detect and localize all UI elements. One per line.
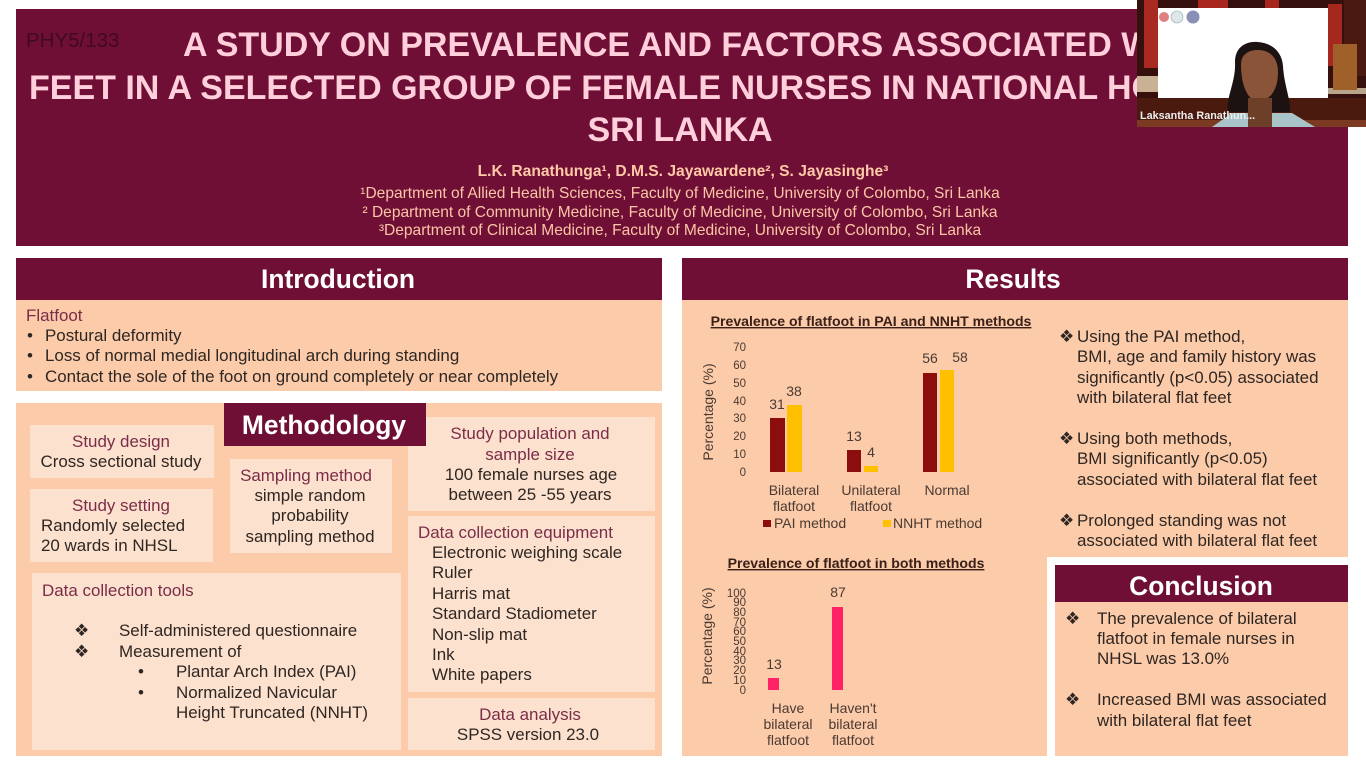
NNHT bars bbox=[787, 370, 954, 472]
title bbox=[29, 26, 1302, 149]
results findings: BMI, age and family history was bbox=[1077, 347, 1316, 366]
results findings: ❖ bbox=[1059, 327, 1074, 346]
results findings: Prolonged standing was not bbox=[1077, 511, 1286, 530]
bar chart: prevalence in both methods: 40 bbox=[733, 646, 746, 658]
heading: methodology: Methodology bbox=[242, 410, 406, 440]
bar chart: prevalence in both methods: flatfoot bbox=[832, 732, 874, 748]
results findings: significantly (p<0.05) associated bbox=[1077, 368, 1318, 387]
box: data collection equipment: Ink bbox=[432, 645, 455, 664]
bar chart: prevalence in PAI and NNHT methods: 70 bbox=[733, 342, 746, 354]
bar chart: prevalence in both methods: 100 bbox=[727, 588, 746, 600]
bar chart: prevalence in PAI and NNHT methods: NNHT method bbox=[893, 515, 982, 531]
bar chart: prevalence in both methods: 60 bbox=[733, 626, 746, 638]
bar chart: prevalence in PAI and NNHT methods: Percentage (%) bbox=[700, 363, 716, 461]
panel: results bbox=[682, 258, 1348, 756]
results findings bbox=[1059, 327, 1318, 550]
conclusion text: ❖ bbox=[1065, 690, 1080, 709]
box: data collection tools: ❖ bbox=[74, 621, 89, 640]
results findings: associated with bilateral flat feet bbox=[1077, 470, 1317, 489]
results findings: Using the PAI method, bbox=[1077, 327, 1245, 346]
bar chart: prevalence in both methods: 50 bbox=[733, 636, 746, 648]
introduction text: • bbox=[27, 346, 33, 365]
bar chart: prevalence in PAI and NNHT methods: flatfoot bbox=[773, 498, 815, 514]
box: data collection equipment: Ruler bbox=[432, 563, 473, 582]
box: data collection tools: • bbox=[138, 683, 144, 702]
results findings: ❖ bbox=[1059, 429, 1074, 448]
bar chart: prevalence in PAI and NNHT methods: 38 bbox=[786, 383, 802, 399]
bar chart: prevalence in both methods: bilateral bbox=[828, 716, 878, 732]
box: data collection tools: Self-administered questionnaire bbox=[119, 621, 357, 640]
box: data collection equipment: Electronic weighing scale bbox=[432, 543, 622, 562]
slide logos bbox=[1159, 10, 1200, 24]
bar chart: prevalence in PAI and NNHT methods: Prevalence of flatfoot in PAI and NNHT methods bbox=[711, 313, 1032, 329]
box: study setting: Randomly selected bbox=[41, 516, 185, 535]
authors and affiliations: ² Department of Community Medicine, Faculty of Medicine, University of Colombo, Sri Lanka bbox=[362, 204, 998, 221]
box: data collection equipment: White papers bbox=[432, 665, 532, 684]
authors and affiliations: ¹Department of Allied Health Sciences, Faculty of Medicine, University of Colombo, Sri Lanka bbox=[360, 185, 1000, 202]
bar chart: prevalence in both methods: Have bbox=[772, 700, 805, 716]
box: data collection tools: Measurement of bbox=[119, 642, 242, 661]
poster code: PHY5/133 bbox=[26, 29, 119, 52]
results findings: with bilateral flat feet bbox=[1076, 388, 1232, 407]
box: data analysis bbox=[408, 698, 655, 750]
box: study population: between 25 -55 years bbox=[449, 485, 611, 504]
introduction text: Contact the sole of the foot on ground completely or near completely bbox=[45, 367, 559, 386]
bar chart: prevalence in PAI and NNHT methods: 31 bbox=[769, 396, 785, 412]
shared slide bbox=[1158, 8, 1328, 98]
title: SRI LANKA bbox=[587, 111, 773, 149]
box: study setting bbox=[30, 489, 213, 562]
bar chart: prevalence in PAI and NNHT methods: 40 bbox=[733, 396, 746, 408]
box: sampling method: Sampling method bbox=[240, 466, 372, 485]
bar chart: prevalence in PAI and NNHT methods: 58 bbox=[952, 349, 968, 365]
panel: methodology bbox=[16, 403, 662, 756]
box: study setting: 20 wards in NHSL bbox=[41, 536, 178, 555]
results findings: associated with bilateral flat feet bbox=[1077, 531, 1317, 550]
bar chart: prevalence in both methods: 87 bbox=[830, 584, 846, 600]
conclusion text: The prevalence of bilateral bbox=[1097, 609, 1297, 628]
bar chart: prevalence in PAI and NNHT methods: 13 bbox=[846, 428, 862, 444]
box: data collection tools: ❖ bbox=[74, 642, 89, 661]
presenter name: Laksantha Ranathun... bbox=[1140, 110, 1255, 122]
box: sampling method: sampling method bbox=[246, 527, 374, 546]
bar chart: prevalence in PAI and NNHT methods: 56 bbox=[922, 350, 938, 366]
box: study design: Cross sectional study bbox=[41, 452, 202, 471]
heading: results: Results bbox=[965, 264, 1061, 294]
authors and affiliations bbox=[360, 163, 1000, 239]
results findings: Using both methods, bbox=[1077, 429, 1232, 448]
bar chart: prevalence in both methods: 80 bbox=[733, 607, 746, 619]
box: data collection tools: Normalized Navicular bbox=[176, 683, 337, 702]
box: data collection equipment bbox=[408, 516, 655, 692]
bar chart: prevalence in PAI and NNHT methods: PAI method bbox=[774, 515, 846, 531]
box: data collection tools: Height Truncated (NNHT) bbox=[176, 703, 368, 722]
box: study design bbox=[30, 425, 214, 478]
bar chart: prevalence in PAI and NNHT methods: 20 bbox=[733, 431, 746, 443]
box: data collection equipment: Harris mat bbox=[432, 584, 510, 603]
box: data collection equipment: Data collection equipment bbox=[418, 523, 613, 542]
bar chart: prevalence in both methods: 20 bbox=[733, 665, 746, 677]
panel: conclusion bbox=[1055, 565, 1348, 756]
webcam overlay bbox=[1137, 0, 1366, 127]
box: study population bbox=[408, 417, 655, 511]
conclusion text: Increased BMI was associated bbox=[1097, 690, 1327, 709]
introduction text: • bbox=[27, 367, 33, 386]
bar chart: prevalence in both methods: 10 bbox=[733, 675, 746, 687]
box: study population: sample size bbox=[485, 445, 575, 464]
heading: introduction: Introduction bbox=[261, 264, 415, 294]
box: data collection equipment: Non-slip mat bbox=[432, 625, 527, 644]
heading: conclusion: Conclusion bbox=[1129, 571, 1273, 601]
authors and affiliations: ³Department of Clinical Medicine, Faculty of Medicine, University of Colombo, Sri Lanka bbox=[379, 222, 981, 239]
introduction text bbox=[26, 306, 559, 386]
box: data collection tools bbox=[32, 573, 401, 750]
conclusion text: ❖ bbox=[1065, 609, 1080, 628]
conclusion text: with bilateral flat feet bbox=[1096, 711, 1252, 730]
box: data collection tools: Data collection tools bbox=[42, 581, 194, 600]
bar chart: prevalence in both methods: Percentage (%) bbox=[699, 587, 715, 685]
box: study population: Study population and bbox=[450, 424, 610, 443]
box: data collection equipment: Standard Stadiometer bbox=[432, 604, 597, 623]
box: study setting: Study setting bbox=[72, 496, 170, 515]
box: data analysis: Data analysis bbox=[479, 705, 581, 724]
bar chart: prevalence in both methods: 13 bbox=[766, 656, 782, 672]
bar chart: prevalence in both methods: 70 bbox=[733, 617, 746, 629]
results findings: ❖ bbox=[1059, 511, 1074, 530]
presenter bbox=[1212, 42, 1315, 127]
conclusion text bbox=[1065, 609, 1327, 730]
box: data collection tools: • bbox=[138, 662, 144, 681]
box: study design: Study design bbox=[72, 432, 170, 451]
box: sampling method: probability bbox=[271, 506, 349, 525]
bar chart: prevalence in PAI and NNHT methods: 4 bbox=[867, 444, 875, 460]
box: study population: 100 female nurses age bbox=[445, 465, 617, 484]
bar chart: prevalence in PAI and NNHT methods: 10 bbox=[733, 449, 746, 461]
bar chart: prevalence in PAI and NNHT methods: 30 bbox=[733, 413, 746, 425]
heading: methodology bbox=[224, 403, 426, 446]
introduction text: Flatfoot bbox=[26, 306, 83, 325]
bar chart: prevalence in both methods: 0 bbox=[740, 685, 746, 697]
introduction text: Loss of normal medial longitudinal arch during standing bbox=[45, 346, 459, 365]
bar chart: prevalence in PAI and NNHT methods: Normal bbox=[924, 482, 970, 498]
bar chart: prevalence in PAI and NNHT methods bbox=[700, 313, 1032, 531]
bar chart: prevalence in both methods bbox=[699, 555, 985, 748]
panel: introduction bbox=[16, 258, 662, 391]
bar chart: prevalence in PAI and NNHT methods: Bilateral bbox=[769, 482, 819, 498]
bar chart: prevalence in both methods: bilateral bbox=[763, 716, 813, 732]
conclusion text: NHSL was 13.0% bbox=[1097, 649, 1229, 668]
bar chart: prevalence in both methods: Prevalence of flatfoot in both methods bbox=[728, 555, 985, 571]
PAI bars bbox=[770, 373, 937, 472]
box: data collection tools: Plantar Arch Index (PAI) bbox=[176, 662, 356, 681]
bar chart: prevalence in PAI and NNHT methods: Unilateral bbox=[841, 482, 901, 498]
authors and affiliations: L.K. Ranathunga¹, D.M.S. Jayawardene², S. Jayasinghe³ bbox=[478, 163, 888, 180]
box: data analysis: SPSS version 23.0 bbox=[457, 725, 599, 744]
bar chart: prevalence in both methods: Haven't bbox=[829, 700, 877, 716]
conclusion text: flatfoot in female nurses in bbox=[1097, 629, 1295, 648]
bar chart: prevalence in both methods: 30 bbox=[733, 655, 746, 667]
introduction text: Postural deformity bbox=[45, 326, 182, 345]
bar chart: prevalence in PAI and NNHT methods: flatfoot bbox=[850, 498, 892, 514]
bar chart: prevalence in both methods: flatfoot bbox=[767, 732, 809, 748]
title: FEET IN A SELECTED GROUP OF FEMALE NURSES IN NATIONAL HOSPITAL, bbox=[29, 69, 1286, 107]
results findings: BMI significantly (p<0.05) bbox=[1077, 449, 1268, 468]
bar chart: prevalence in PAI and NNHT methods: 0 bbox=[740, 467, 746, 479]
box: sampling method bbox=[230, 459, 392, 553]
bar chart: prevalence in PAI and NNHT methods: 50 bbox=[733, 378, 746, 390]
bar chart: prevalence in both methods: 90 bbox=[733, 597, 746, 609]
introduction text: • bbox=[27, 326, 33, 345]
bar chart: prevalence in PAI and NNHT methods: 60 bbox=[733, 360, 746, 372]
title: A STUDY ON PREVALENCE AND FACTORS ASSOCIATED WITH FLAT bbox=[183, 26, 1302, 64]
box: sampling method: simple random bbox=[254, 486, 366, 505]
